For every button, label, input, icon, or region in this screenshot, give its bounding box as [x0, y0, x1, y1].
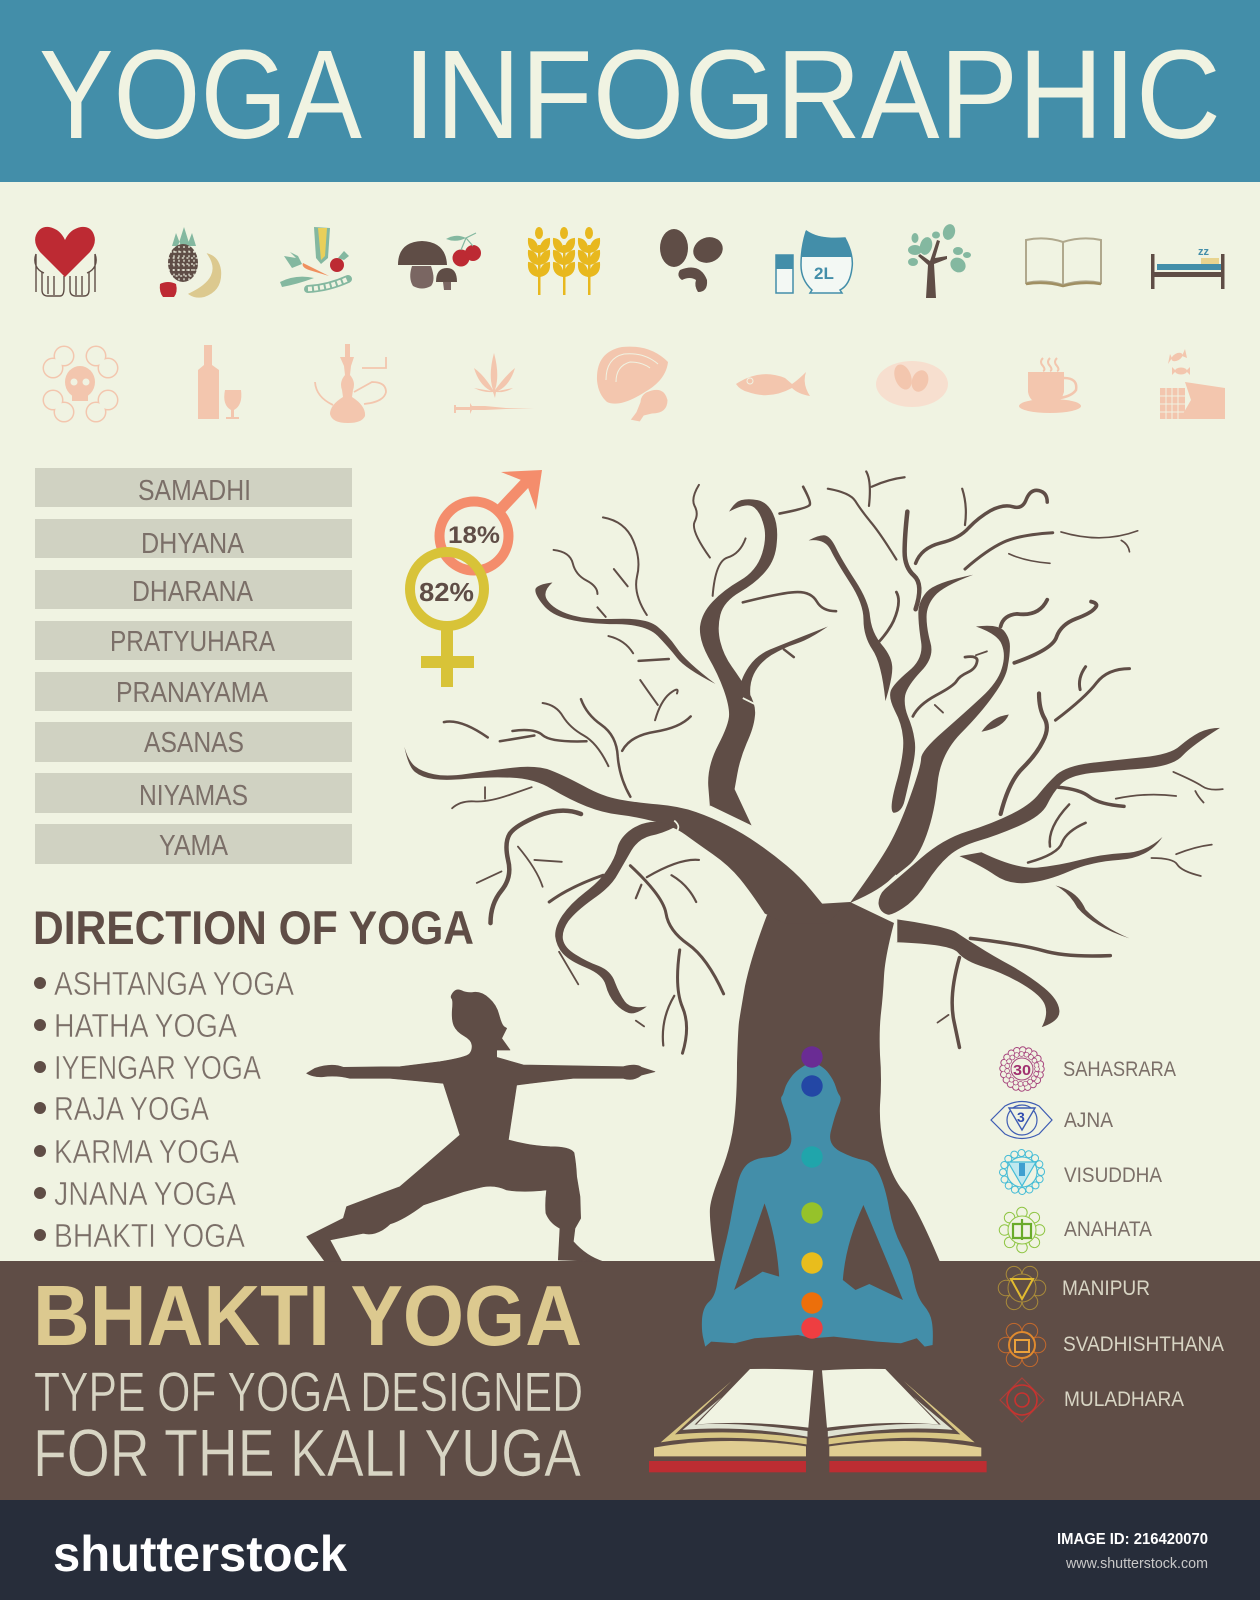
bar: samadhi	[35, 468, 352, 507]
bar: pranayama	[35, 672, 352, 711]
list: yoga directions: ASHTANGA YOGA	[54, 965, 294, 1002]
description: type of yoga designed for the kali yuga: FOR THE KALI YUGA	[33, 1416, 581, 1491]
icon: small tree	[908, 223, 971, 298]
icon: cannabis and syringe	[454, 353, 534, 414]
bar: niyamas: NIYAMAS	[139, 780, 248, 812]
list: yoga directions: RAJA YOGA	[54, 1090, 209, 1127]
bar: pratyuhara: PRATYUHARA	[110, 626, 276, 658]
icon: fruit	[160, 227, 220, 297]
eight limbs of yoga list	[35, 468, 352, 864]
description: type of yoga designed for the kali yuga	[33, 1360, 583, 1491]
footer bar: IMAGE ID: 216420070	[1057, 1531, 1208, 1548]
icon: fish	[736, 372, 810, 396]
chakra: muladhara	[1000, 1378, 1184, 1422]
chakra: visuddha	[1003, 1153, 1162, 1191]
icon: female symbol 82%	[410, 552, 484, 687]
icon: hookah	[315, 344, 386, 423]
open book illustration	[649, 1369, 987, 1472]
tree branches	[404, 471, 1223, 1053]
list: yoga directions: BHAKTI YOGA	[54, 1217, 245, 1254]
pale gaps between limbs	[674, 698, 896, 942]
icon: candy and chocolate	[1160, 349, 1225, 419]
footer bar: shutterstock	[53, 1526, 347, 1582]
icon: nuts and beans	[660, 229, 726, 292]
list: yoga directions: IYENGAR YOGA	[54, 1049, 261, 1086]
chakra: muladhara: MULADHARA	[1064, 1388, 1184, 1411]
description: type of yoga designed for the kali yuga: TYPE OF YOGA DESIGNED	[34, 1360, 583, 1423]
title banner: YOGA	[39, 24, 362, 165]
icon: vegetables	[280, 227, 349, 289]
heading: direction of yoga: DIRECTION OF YOGA	[33, 901, 474, 954]
chakra: anahata: ANAHATA	[1064, 1218, 1152, 1241]
bar: dhyana	[35, 519, 352, 560]
left book half	[649, 1369, 813, 1472]
bar: asanas: ASANAS	[144, 727, 244, 759]
bar: pranayama: PRANAYAMA	[116, 677, 269, 709]
bar: dhyana: DHYANA	[141, 528, 245, 560]
title banner	[0, 0, 1260, 182]
bar: asanas	[35, 722, 352, 762]
bar: yama	[35, 824, 352, 864]
gender ratio chart	[410, 470, 542, 687]
icon: water jug and glass	[776, 230, 852, 293]
icon: heart in hands	[35, 227, 96, 296]
icon: water jug and glass: 2L	[814, 264, 834, 283]
icon: male symbol 18%: 18%	[448, 522, 500, 549]
warrior pose silhouette	[307, 990, 655, 1262]
right book half	[822, 1369, 987, 1472]
bar: niyamas	[35, 773, 352, 813]
recommended icons row	[35, 223, 1224, 298]
bar: dharana	[35, 570, 352, 609]
brown bottom band	[0, 1261, 1260, 1500]
tree trunk	[710, 902, 940, 1262]
icon: skull and crossbones	[42, 346, 118, 422]
figure silhouette	[702, 1062, 933, 1347]
bar: yama: YAMA	[159, 830, 229, 862]
chakra: anahata	[1004, 1212, 1152, 1248]
chakra: ajna	[991, 1102, 1113, 1138]
chakra: ajna: AJNA	[1064, 1109, 1113, 1132]
icon: wheat	[529, 227, 599, 295]
chakra: svadhishthana: SVADHISHTHANA	[1063, 1333, 1224, 1356]
avoided items icons row	[42, 344, 1225, 423]
chakra: ajna: 3	[1017, 1109, 1025, 1125]
list: yoga directions: JNANA YOGA	[54, 1175, 236, 1212]
seated meditating figure	[702, 1046, 933, 1347]
heading: bhakti yoga: BHAKTI YOGA	[33, 1269, 582, 1364]
chakra: manipur: MANIPUR	[1062, 1277, 1150, 1300]
icon: coffee cup	[1019, 358, 1081, 413]
icon: mushrooms and cherries	[398, 233, 481, 290]
tree illustration	[404, 471, 1223, 1262]
chakra dots	[801, 1046, 823, 1339]
bar: pratyuhara	[35, 621, 352, 660]
chakra: sahasrara: 30	[1013, 1062, 1031, 1079]
chakra: svadhishthana	[1006, 1329, 1224, 1361]
icon: eggs in nest	[876, 361, 948, 407]
footer bar	[0, 1500, 1260, 1600]
bar: dharana: DHARANA	[132, 576, 254, 608]
icon: bottle and wine glass	[198, 345, 241, 419]
main limbs	[404, 499, 1220, 1027]
twigs	[444, 471, 1223, 1053]
icon: open book	[1026, 238, 1101, 286]
icon: female symbol 82%: 82%	[419, 577, 474, 607]
list: yoga directions: HATHA YOGA	[54, 1007, 237, 1044]
list: yoga directions	[34, 965, 294, 1254]
chakra: manipur	[1006, 1272, 1150, 1304]
icon: bed: zz	[1198, 246, 1210, 258]
icon: male symbol 18%	[440, 470, 542, 570]
chakra: visuddha: VISUDDHA	[1064, 1164, 1162, 1187]
list: yoga directions: KARMA YOGA	[54, 1133, 239, 1170]
footer bar: www.shutterstock.com	[1065, 1555, 1208, 1572]
chakra legend	[991, 1050, 1224, 1422]
title banner: INFOGRAPHIC	[403, 24, 1221, 165]
icon: bed	[1151, 246, 1224, 289]
icon: meat and chicken leg	[597, 347, 668, 422]
chakra: sahasrara	[1003, 1050, 1176, 1088]
chakra: sahasrara: SAHASRARA	[1063, 1058, 1176, 1081]
bar: samadhi: SAMADHI	[138, 475, 251, 507]
